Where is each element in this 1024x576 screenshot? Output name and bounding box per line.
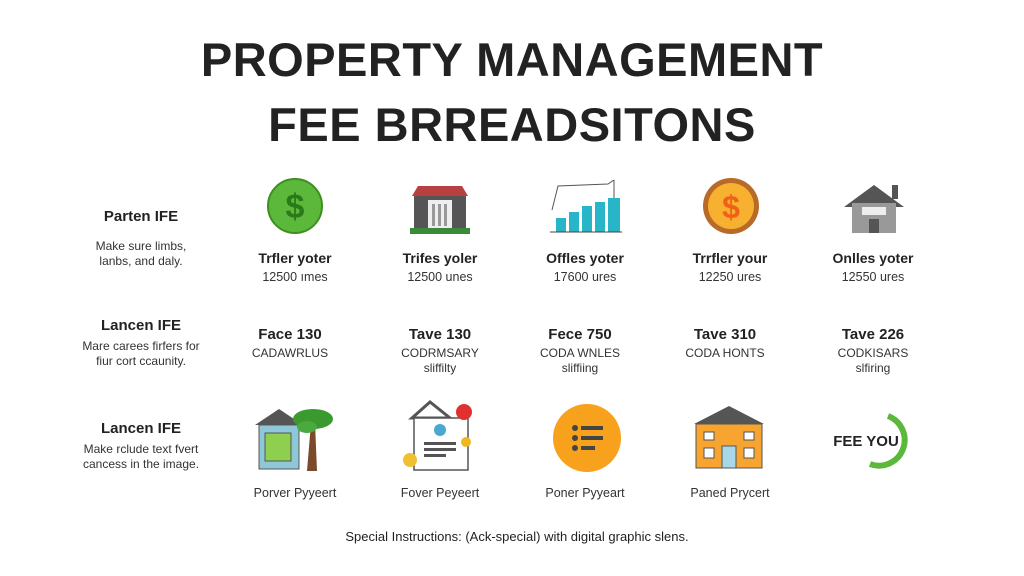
text: 17600 ures [554,270,616,284]
row1 texts: 12500 ımes [262,270,328,284]
row1 texts [258,250,332,284]
row2 texts: Face 130 [258,326,322,343]
row label 2: Mare carees firfers for [82,339,200,353]
icon: green dollar coin [267,178,323,234]
text: 12500 unes [407,270,473,284]
row label 1: lanbs, and daly. [99,254,183,268]
row label 1: Make sure limbs, [96,239,186,253]
text: Fece 750 [548,326,612,343]
row3 labels: Porver Pyyeert [254,486,336,500]
text: CODRMSARY [401,346,479,360]
icon: document with seal [403,400,472,471]
icon: house with palm tree [255,409,333,471]
icon: bank building [410,186,470,234]
text: sliffiing [562,361,598,375]
text: Poner Pyyeart [545,486,625,500]
icon: FEE YOU green ring [833,413,908,469]
icon: orange house [694,406,764,468]
icon: FEE YOU green ring: FEE YOU [833,433,899,450]
text: CODA HONTS [685,346,765,360]
row label 2: fiur cort ccaunity. [96,354,186,368]
row label 2 [82,317,200,368]
row label 3 [83,420,199,471]
title line 2: FEE BRREADSITONS [268,98,756,151]
text: slfiring [856,361,890,375]
icon: orange dollar coin: $ [722,189,740,225]
icon: orange dollar coin [703,178,759,234]
text: Offles yoter [546,250,624,266]
text: CODA WNLES [540,346,620,360]
row label 2: Lancen IFE [101,317,181,334]
text: CODKISARS [838,346,908,360]
row label 3: Make rclude text fvert [84,442,198,456]
text: Paned Prycert [690,486,770,500]
title line 1: PROPERTY MANAGEMENT [201,33,823,86]
text: Tave 226 [842,326,904,343]
icon: bar chart with crane [550,180,622,232]
text: Trrfler your [693,250,767,266]
text: Trifes yoler [403,250,477,266]
row1 texts: Trfler yoter [258,250,332,266]
text: 12550 ures [842,270,904,284]
text: Tave 310 [694,326,756,343]
row2 texts: CADAWRLUS [252,346,328,360]
row label 3: cancess in the image. [83,457,199,471]
text: 12250 ures [699,270,761,284]
row label 1 [96,208,186,268]
icon: grey house [844,185,904,233]
icon: orange list circle [553,404,621,472]
footer: Special Instructions: (Ack-special) with digital graphic slens. [345,529,689,544]
text: Onlles yoter [833,250,913,266]
text: Tave 130 [409,326,471,343]
text: Fover Peyeert [401,486,479,500]
text: sliffilty [424,361,456,375]
row label 1: Parten IFE [104,208,178,225]
row2 texts [252,326,328,360]
icon: green dollar coin: $ [286,188,305,226]
row label 3: Lancen IFE [101,420,181,437]
